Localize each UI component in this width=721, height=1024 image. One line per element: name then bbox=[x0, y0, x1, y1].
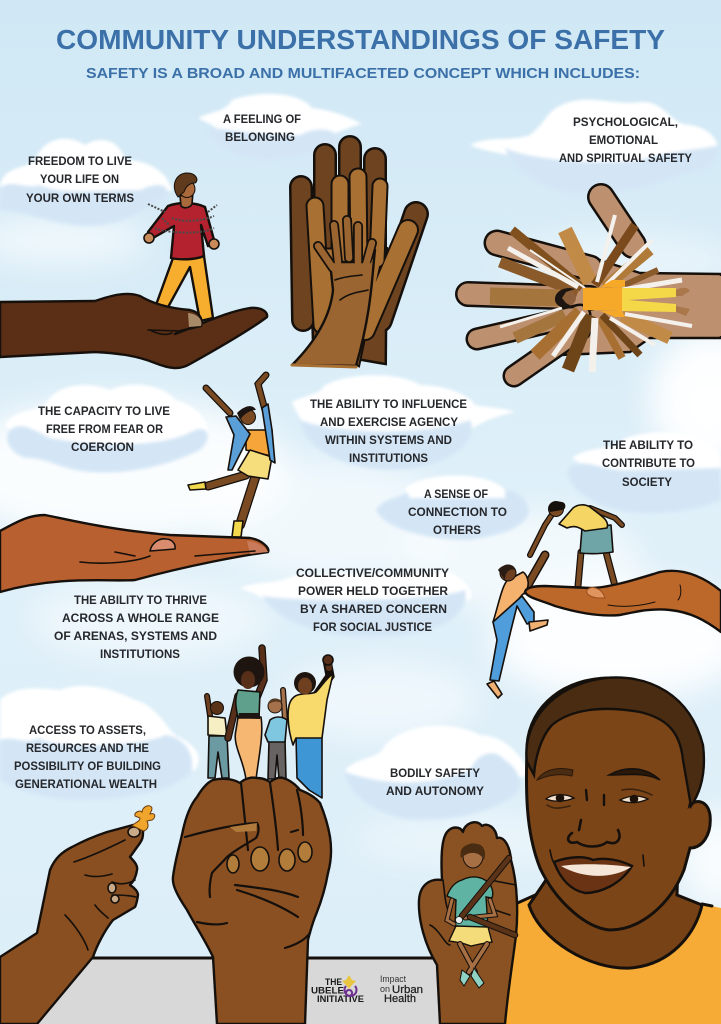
label: influence: INSTITUTIONS bbox=[349, 451, 428, 465]
label: assets bbox=[14, 723, 161, 791]
front small hand bbox=[292, 220, 375, 367]
cloud: capacity bbox=[5, 385, 208, 473]
label: bodily safety: BODILY SAFETY bbox=[390, 766, 480, 780]
pale hand bbox=[468, 197, 721, 376]
label: assets: RESOURCES AND THE bbox=[26, 741, 149, 755]
logo: Impact on Urban Health bbox=[380, 974, 423, 1005]
logo: Impact on Urban Health: on bbox=[380, 984, 390, 994]
cloud: freedom bbox=[0, 139, 172, 226]
soft white haze in the sky bbox=[0, 215, 721, 910]
cloud: contribute bbox=[568, 432, 721, 513]
hair bbox=[526, 678, 704, 806]
clouds behind the text labels bbox=[0, 94, 721, 820]
icon: puzzle piece bbox=[132, 806, 155, 831]
label: capacity: FREE FROM FEAR OR bbox=[46, 422, 163, 436]
label: psychological safety: EMOTIONAL bbox=[589, 133, 658, 147]
label: influence: WITHIN SYSTEMS AND bbox=[325, 433, 452, 447]
label: thrive: ACROSS A WHOLE RANGE bbox=[62, 611, 219, 625]
label: belonging: BELONGING bbox=[225, 130, 295, 144]
label: assets: GENERATIONAL WEALTH bbox=[15, 777, 157, 791]
child bbox=[207, 696, 211, 722]
label: thrive: INSTITUTIONS bbox=[100, 647, 180, 661]
man bbox=[312, 660, 330, 702]
illustration: dancer on terracotta hand bbox=[0, 375, 275, 592]
ground strip bbox=[0, 956, 721, 1024]
illustration: person breaking chains on dark hand bbox=[0, 173, 267, 368]
label: bodily safety bbox=[386, 766, 484, 798]
label: thrive: OF ARENAS, SYSTEMS AND bbox=[54, 629, 217, 643]
label: influence: THE ABILITY TO INFLUENCE bbox=[310, 397, 467, 411]
logo: The Ubele Initiative bbox=[311, 975, 364, 1004]
figure: helping woman bbox=[530, 502, 622, 592]
label: influence: AND EXERCISE AGENCY bbox=[320, 415, 458, 429]
logo: Impact on Urban Health: Impact bbox=[380, 974, 406, 984]
raised fist bbox=[173, 778, 331, 1024]
facial features bbox=[537, 769, 660, 893]
label: freedom: YOUR OWN TERMS bbox=[26, 191, 134, 205]
label: bodily safety: AND AUTONOMY bbox=[386, 784, 484, 798]
cloud: belonging bbox=[198, 94, 362, 160]
label: influence bbox=[310, 397, 467, 465]
label: connection: CONNECTION TO bbox=[408, 505, 507, 519]
figures: family group bbox=[207, 648, 333, 798]
logo: The Ubele Initiative: UBELE bbox=[311, 986, 344, 996]
label: collective power: POWER HELD TOGETHER bbox=[298, 584, 448, 598]
logo: The Ubele Initiative: THE bbox=[325, 977, 342, 987]
label: freedom: FREEDOM TO LIVE bbox=[28, 154, 132, 168]
illustration: three overlapping raised hands bbox=[292, 147, 416, 367]
figure: climbing man bbox=[487, 555, 548, 698]
label: capacity: COERCION bbox=[71, 440, 134, 454]
orange-brown hand bbox=[525, 571, 721, 632]
label: psychological safety bbox=[559, 115, 692, 165]
label: thrive: THE ABILITY TO THRIVE bbox=[74, 593, 207, 607]
raised palm bbox=[419, 822, 517, 1024]
label: contribute: CONTRIBUTE TO bbox=[602, 456, 695, 470]
label: capacity: THE CAPACITY TO LIVE bbox=[38, 404, 170, 418]
label: assets: POSSIBILITY OF BUILDING bbox=[14, 759, 161, 773]
label: connection: A SENSE OF bbox=[424, 487, 488, 501]
illustration: hand holding puzzle piece bbox=[0, 825, 143, 1024]
burst rays bbox=[490, 215, 692, 372]
cloud: influence bbox=[292, 375, 515, 470]
illustration: woman helping man on hand bbox=[487, 502, 721, 698]
label: assets: ACCESS TO ASSETS, bbox=[29, 723, 146, 737]
label: connection bbox=[408, 487, 507, 537]
label: contribute: THE ABILITY TO bbox=[603, 438, 693, 452]
cloud: connection bbox=[376, 475, 529, 540]
subtitle: SAFETY IS A BROAD AND MULTIFACETED CONCEPT WHICH INCLUDES: bbox=[86, 66, 640, 82]
label: collective power: FOR SOCIAL JUSTICE bbox=[313, 620, 432, 634]
boy bbox=[283, 690, 285, 720]
label: belonging bbox=[223, 112, 301, 144]
label: freedom bbox=[26, 154, 134, 205]
title: COMMUNITY UNDERSTANDINGS OF SAFETY bbox=[56, 24, 665, 55]
label: collective power bbox=[296, 566, 449, 634]
figure: dancer bbox=[188, 375, 275, 537]
terracotta hand bbox=[0, 515, 268, 592]
label: collective power: COLLECTIVE/COMMUNITY bbox=[296, 566, 449, 580]
logo: Impact on Urban Health: Health bbox=[384, 993, 416, 1005]
head bbox=[526, 678, 710, 930]
label: freedom: YOUR LIFE ON bbox=[40, 172, 119, 186]
logo: The Ubele Initiative: INITIATIVE bbox=[317, 994, 364, 1004]
dark hand bbox=[0, 294, 267, 368]
cloud: access bbox=[0, 686, 199, 800]
woman bbox=[256, 648, 264, 700]
logo: Impact on Urban Health: Urban bbox=[392, 984, 423, 996]
label: contribute bbox=[602, 438, 695, 489]
label: contribute: SOCIETY bbox=[622, 475, 672, 489]
back dark hand bbox=[301, 147, 416, 362]
t-shirt bbox=[505, 892, 721, 1024]
middle tan hand bbox=[315, 177, 408, 364]
label: connection: OTHERS bbox=[433, 523, 481, 537]
figure: man in red sweater bbox=[144, 173, 219, 321]
label: capacity bbox=[38, 404, 170, 454]
neck bbox=[529, 860, 702, 968]
child with seatbelt in palm bbox=[447, 844, 515, 988]
label: belonging: A FEELING OF bbox=[223, 112, 301, 126]
illustration: figure on open hand with burst bbox=[468, 197, 721, 376]
figure lying in palm bbox=[555, 280, 690, 317]
cloud: bodily bbox=[345, 726, 530, 820]
illustration: man with child on his hand bbox=[419, 678, 721, 1024]
label: collective power: BY A SHARED CONCERN bbox=[300, 602, 447, 616]
label: thrive bbox=[54, 593, 219, 661]
cloud: psychological bbox=[470, 100, 719, 193]
cloud: collective bbox=[240, 572, 471, 637]
label: psychological safety: PSYCHOLOGICAL, bbox=[573, 115, 678, 129]
label: psychological safety: AND SPIRITUAL SAFETY bbox=[559, 151, 692, 165]
illustration: family on raised fist bbox=[173, 648, 333, 1024]
